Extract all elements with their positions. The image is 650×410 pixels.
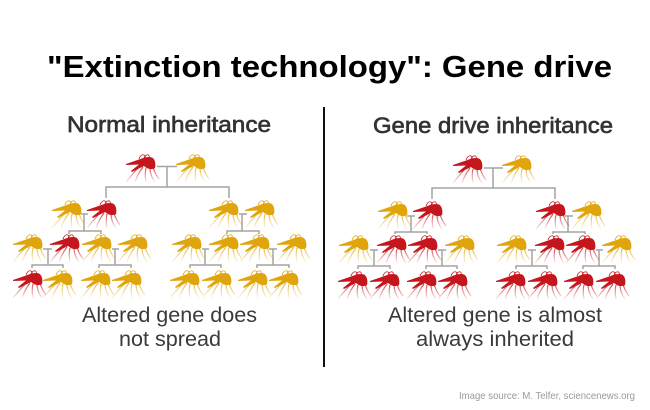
panel: normal inheritance: [13, 112, 310, 351]
mosquito: generation 1: [126, 155, 209, 182]
panel: gene drive inheritance: [338, 113, 635, 351]
image source credit: Image source: M. Telfer, sciencenews.org: [459, 390, 635, 402]
mosquito: generation 3: [13, 235, 310, 262]
caption: gene drive inheritance: always inherited: [416, 328, 574, 351]
family tree: normal inheritance: [13, 155, 310, 298]
mosquito: generation 4: [13, 271, 302, 298]
caption: normal inheritance: not spread: [119, 328, 221, 351]
caption: normal inheritance: Altered gene does: [82, 304, 257, 327]
heading: normal inheritance: Normal inheritance: [67, 112, 271, 137]
connector lines: [358, 168, 615, 269]
mosquito: generation 2: [52, 201, 278, 228]
divider: [323, 107, 325, 367]
family tree: gene drive inheritance: [338, 156, 635, 299]
mosquito: generation 4: [338, 272, 629, 299]
heading: gene drive inheritance: Gene drive inheritance: [373, 113, 613, 138]
connector lines: [32, 166, 289, 268]
caption: gene drive inheritance: [388, 304, 602, 351]
mosquito: generation 2: [378, 202, 605, 229]
caption: gene drive inheritance: Altered gene is almost: [388, 304, 602, 327]
caption: normal inheritance: [82, 304, 257, 351]
mosquito: generation 1: [453, 156, 535, 183]
title: "Extinction technology": Gene drive: [47, 49, 612, 84]
mosquito: generation 3: [339, 236, 635, 263]
